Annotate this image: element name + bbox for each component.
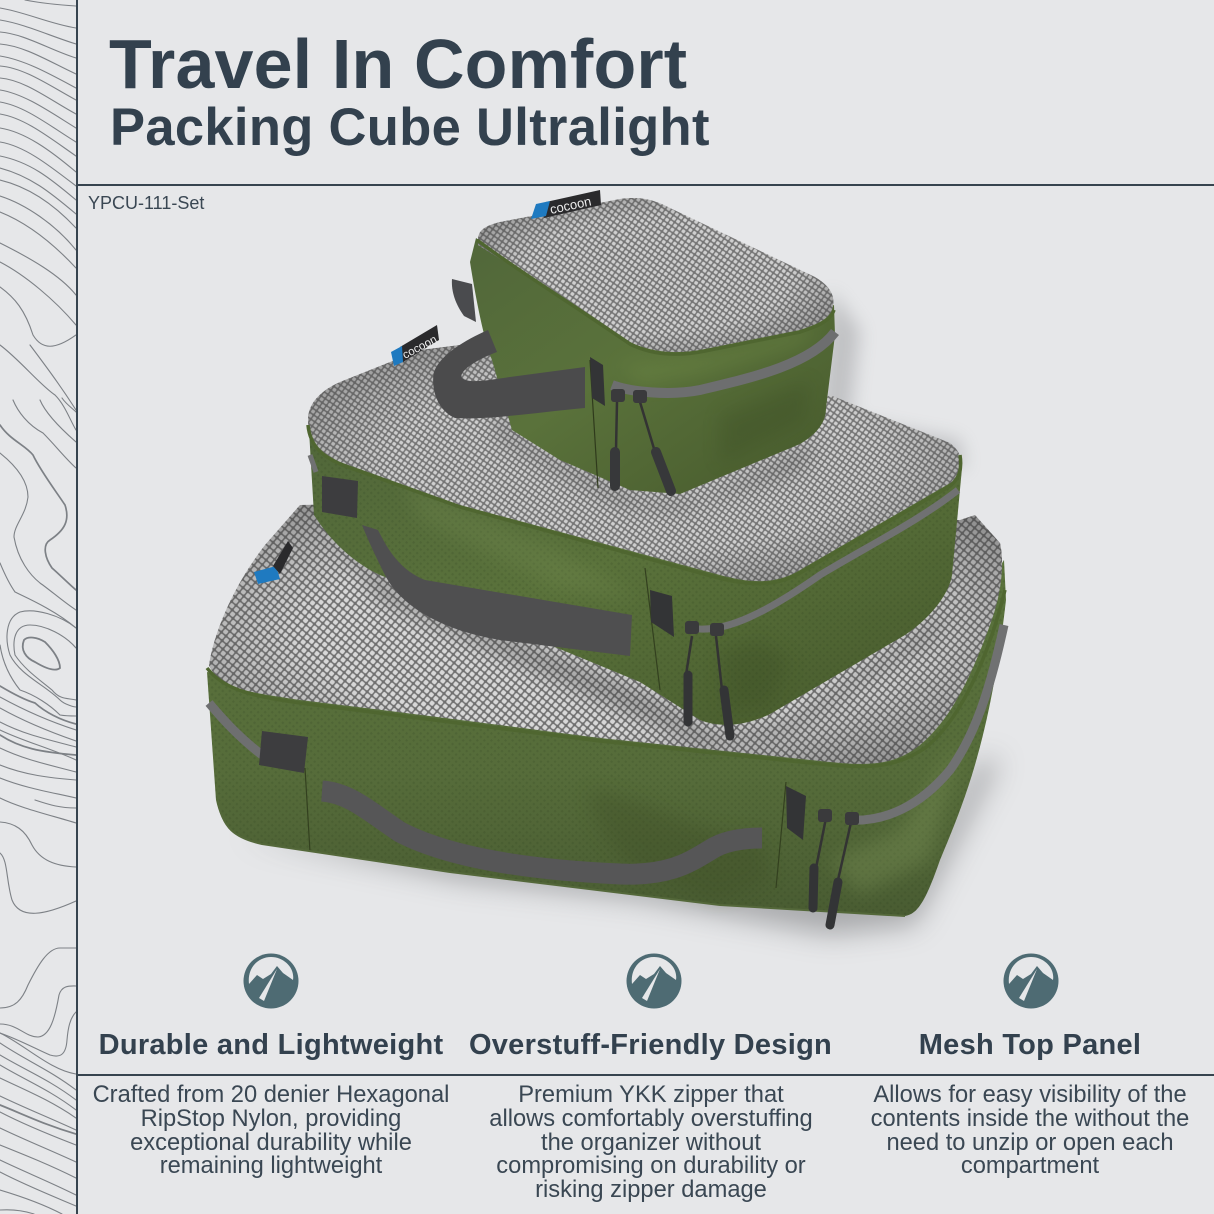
text: durable and lightweight description: remaining lightweight bbox=[160, 1153, 382, 1179]
top horizontal divider bbox=[76, 184, 1214, 186]
shadows bbox=[240, 290, 1000, 935]
icon: mountain badge 3 bbox=[1004, 954, 1058, 1008]
text: overstuff-friendly description: compromising on durability or bbox=[496, 1153, 806, 1179]
medium cube tab bbox=[322, 476, 358, 518]
large cube bbox=[207, 500, 1006, 925]
heading: overstuff-friendly design: Overstuff-Friendly Design bbox=[469, 1029, 832, 1061]
topographic contour pattern bbox=[0, 0, 76, 1214]
text: durable and lightweight description: RipStop Nylon, providing bbox=[141, 1106, 401, 1132]
icon: mountain badge 2 bbox=[626, 954, 682, 1008]
text: mesh top panel description: compartment bbox=[961, 1153, 1099, 1179]
text: mesh top panel description: need to unzip or open each bbox=[886, 1130, 1174, 1156]
cocoon brand tags bbox=[254, 190, 601, 584]
text: durable and lightweight description: exceptional durability while bbox=[130, 1130, 412, 1156]
small cube handle bbox=[433, 330, 585, 418]
title: Travel In Comfort bbox=[109, 25, 687, 103]
heading: durable and lightweight: Durable and Lightweight bbox=[99, 1029, 443, 1061]
small cube zipper pulls bbox=[616, 402, 658, 462]
medium cube handle bbox=[362, 525, 632, 656]
text: overstuff-friendly description bbox=[489, 1082, 813, 1203]
lower horizontal divider bbox=[76, 1074, 1214, 1076]
text: durable and lightweight description: Crafted from 20 denier Hexagonal bbox=[93, 1082, 449, 1108]
vertical divider bbox=[76, 0, 78, 1214]
text: overstuff-friendly description: the organizer without bbox=[541, 1130, 761, 1156]
product code: YPCU-111-Set bbox=[88, 193, 204, 213]
large cube tab bbox=[259, 731, 308, 773]
medium cube zipper pulls bbox=[686, 636, 722, 690]
text: overstuff-friendly description: risking zipper damage bbox=[535, 1177, 767, 1203]
subtitle: Packing Cube Ultralight bbox=[110, 98, 710, 157]
icon: mountain badge 1 bbox=[244, 954, 298, 1008]
heading: mesh top panel: Mesh Top Panel bbox=[919, 1029, 1141, 1061]
text: overstuff-friendly description: allows comfortably overstuffing bbox=[489, 1106, 813, 1132]
medium cube bbox=[308, 340, 962, 736]
cocoon brand tags: cocoon bbox=[549, 194, 593, 217]
cocoon brand tags: cocoon bbox=[401, 334, 439, 362]
large cube handle bbox=[322, 791, 762, 874]
text: durable and lightweight description bbox=[93, 1082, 449, 1179]
small cube tab bbox=[452, 279, 476, 322]
small cube bbox=[433, 198, 835, 510]
text: mesh top panel description bbox=[871, 1082, 1189, 1179]
text: mesh top panel description: contents inside the without the bbox=[871, 1106, 1189, 1132]
large cube zipper pulls bbox=[816, 818, 852, 880]
text: overstuff-friendly description: Premium YKK zipper that bbox=[518, 1082, 784, 1108]
text: mesh top panel description: Allows for easy visibility of the bbox=[873, 1082, 1187, 1108]
